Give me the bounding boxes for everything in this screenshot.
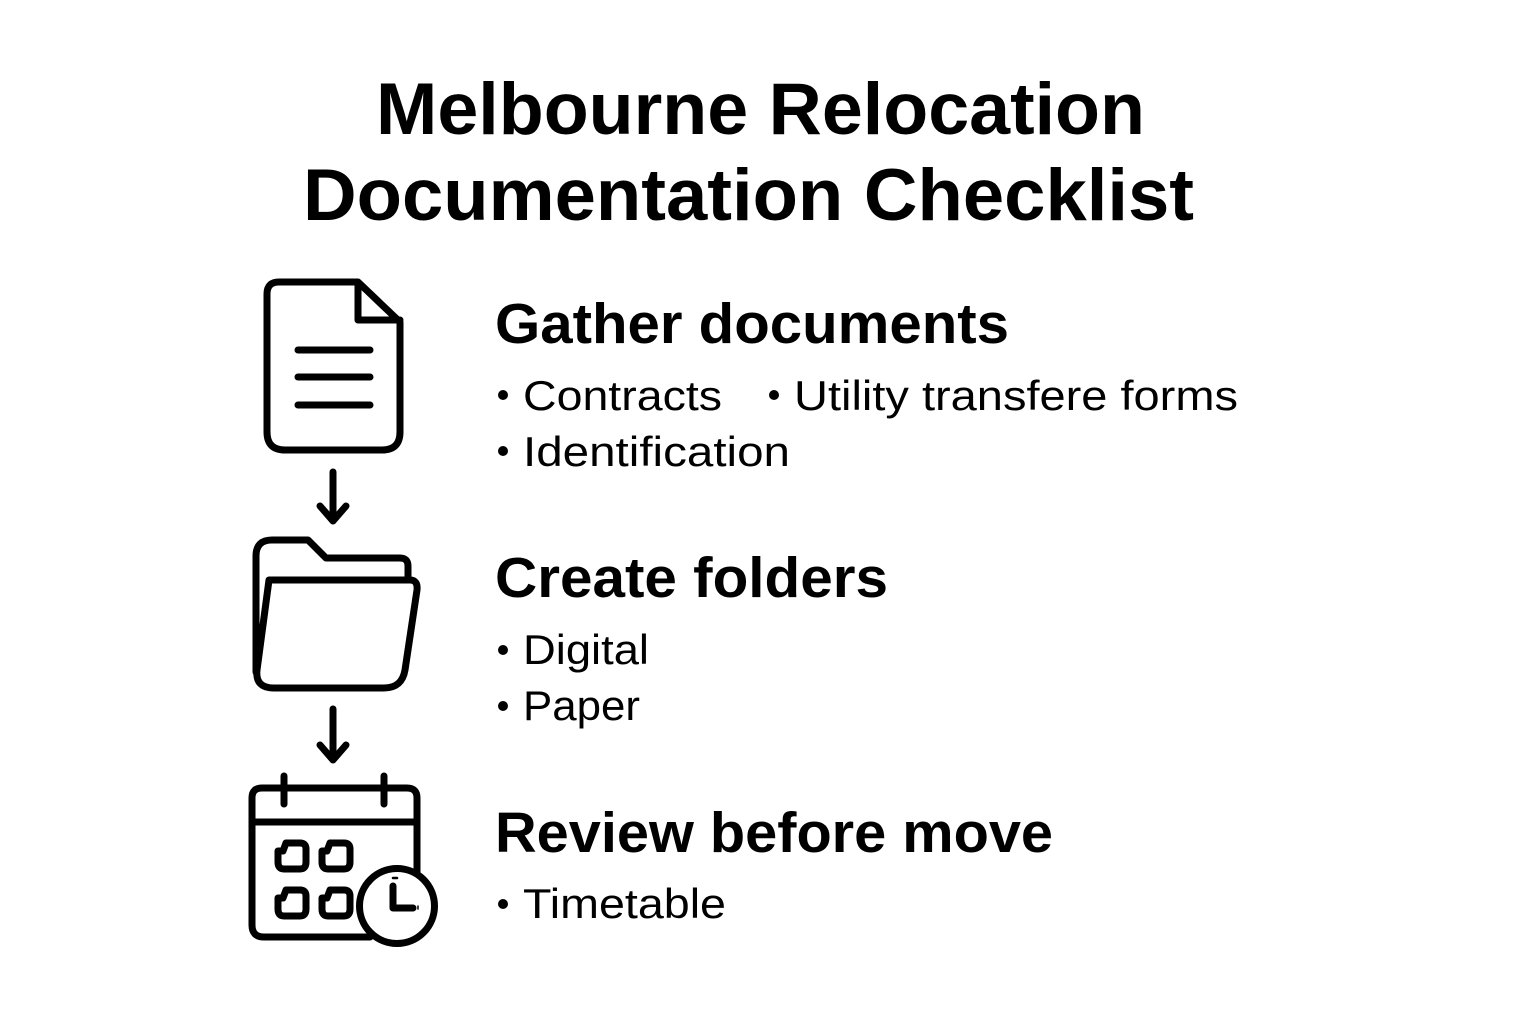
list item: paper: Paper — [523, 682, 640, 729]
arrow: document to folder — [320, 472, 346, 521]
arrow: folder to calendar — [320, 709, 346, 760]
list item: identification: Identification — [523, 428, 790, 475]
title: Documentation Checklist — [303, 155, 1194, 236]
list item: contracts: Contracts — [523, 372, 722, 419]
heading: review before move: Review before move — [495, 801, 1053, 865]
list item: timetable: Timetable — [523, 880, 726, 927]
icon: document — [267, 282, 400, 450]
list item: utility transfere forms: Utility transfere forms — [794, 372, 1238, 419]
heading: gather documents: Gather documents — [495, 292, 1009, 356]
title — [303, 69, 1194, 236]
heading: create folders: Create folders — [495, 546, 888, 610]
title: Melbourne Relocation — [376, 69, 1145, 150]
icon: folder — [256, 540, 417, 688]
icon: calendar with clock — [252, 776, 434, 944]
list item: digital: Digital — [523, 626, 649, 673]
